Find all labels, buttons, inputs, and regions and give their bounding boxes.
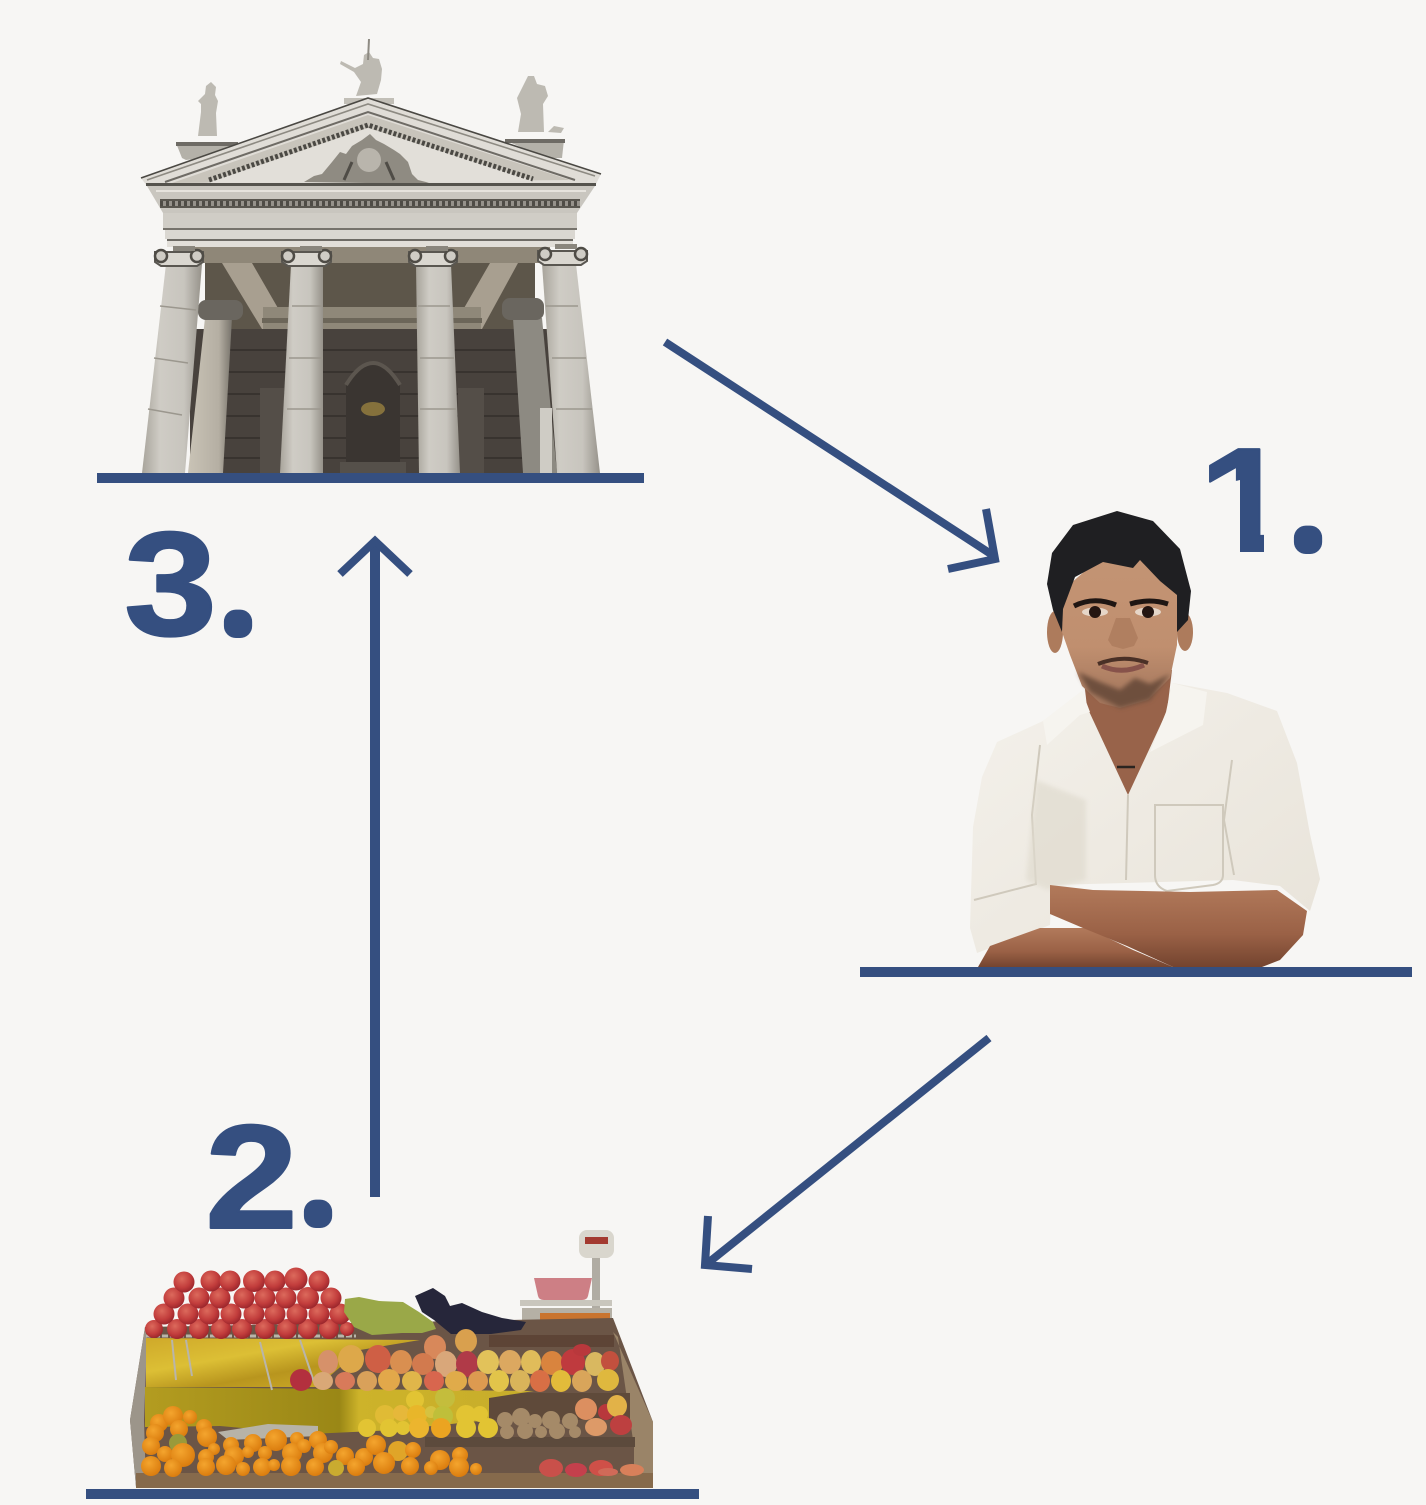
stubble: [1078, 672, 1170, 708]
red apples right: [539, 1395, 644, 1477]
potatoes: [497, 1408, 581, 1439]
face: [1062, 555, 1178, 708]
ears: [1047, 611, 1063, 653]
side plinths: [176, 143, 240, 160]
number 2: 2: [205, 1095, 298, 1260]
collar: [1043, 691, 1090, 745]
neck: [1083, 670, 1172, 795]
entablature: [146, 183, 596, 186]
green grapes: [344, 1297, 436, 1335]
number 1: [1209, 448, 1322, 554]
column drum joints: [148, 306, 592, 415]
oranges: [141, 1406, 482, 1477]
coat of arms: [304, 134, 432, 184]
number 1: 1: [1199, 417, 1290, 582]
shirt shading: [974, 745, 1234, 900]
capitals: [155, 251, 587, 266]
statues on the roof: [198, 39, 564, 136]
moustache and lips: [1098, 659, 1148, 664]
yellow citrus: [358, 1388, 498, 1438]
black grapes: [415, 1288, 526, 1334]
pomegranates: [145, 1268, 354, 1339]
dark stone wall: [190, 329, 560, 473]
silver tinsel: [146, 1334, 356, 1338]
gold foil: [146, 1338, 420, 1387]
shelf line: fruit stall: [86, 1489, 699, 1499]
arrow: man to fruit stall: [705, 1038, 989, 1269]
pediment: [141, 98, 601, 186]
arrow: building to man: [665, 342, 995, 569]
scale: [592, 1258, 600, 1334]
shelf line: building: [97, 473, 644, 483]
shirt: [970, 683, 1320, 953]
number 1: .: [1304, 516, 1312, 549]
number 3: .: [234, 600, 242, 633]
number 3: 3: [124, 502, 217, 667]
illustration: classical government building: [141, 39, 601, 473]
shelf line: man: [860, 967, 1412, 977]
number 2: .: [314, 1190, 322, 1223]
hair: [1047, 511, 1191, 632]
front board: [136, 1473, 653, 1488]
apples and mangoes: [290, 1329, 619, 1392]
front columns: [142, 264, 202, 473]
crate walls: [130, 1318, 653, 1487]
rear columns: [188, 318, 232, 473]
lower forearm: [978, 928, 1173, 967]
illustration: fruit stall: [130, 1230, 653, 1488]
portico ceiling: [190, 247, 550, 263]
upper forearm: [1050, 885, 1307, 967]
necklace: [1117, 766, 1135, 768]
arrow: fruit stall to building: [340, 541, 410, 1197]
brows, eyes, nose, mouth: [1074, 601, 1168, 606]
illustration: man with crossed arms: [970, 511, 1320, 967]
